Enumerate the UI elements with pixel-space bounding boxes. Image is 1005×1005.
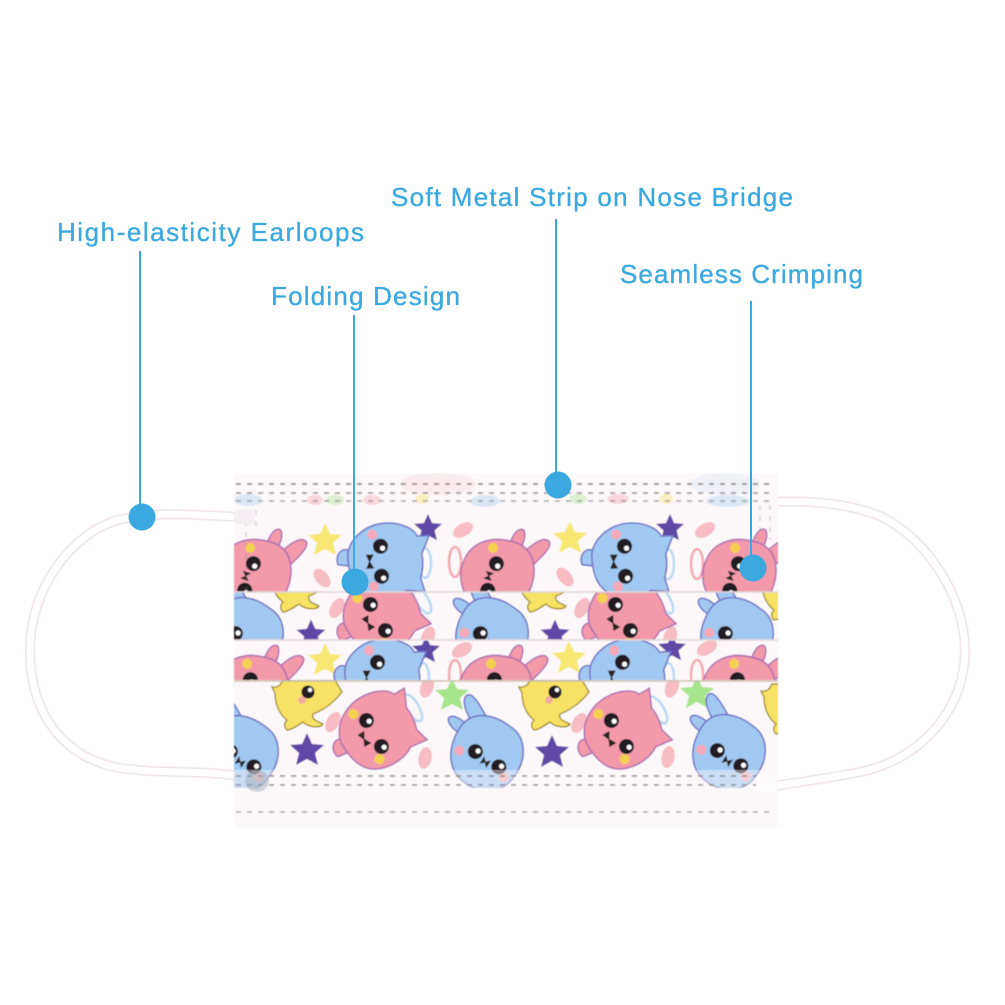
label: folding design: Folding Design [271,281,460,311]
label: metal strip: Soft Metal Strip on Nose Bridge [391,182,793,212]
pleat band 4 with cats and birds [233,680,779,788]
stitching lines [236,484,770,812]
pleat fold shadows [234,592,778,681]
top hem faded print [234,473,778,507]
pleat band 1 with cats [233,514,779,592]
label: earloops: High-elasticity Earloops [57,217,364,247]
left earloop [30,514,238,776]
bottom hem of mask [233,769,760,792]
callout: crimping [620,259,863,582]
pleat band 2 with cats [233,592,779,640]
callout: earloops [57,217,364,530]
pleat band 3 with cats [233,640,779,681]
earloop weld patches [234,510,776,793]
mask fabric [234,473,778,827]
callout: metal strip [391,182,793,498]
right earloop [774,502,965,786]
callout: folding design [271,281,460,596]
label: crimping: Seamless Crimping [620,259,863,289]
face mask with printed pattern [233,473,779,814]
